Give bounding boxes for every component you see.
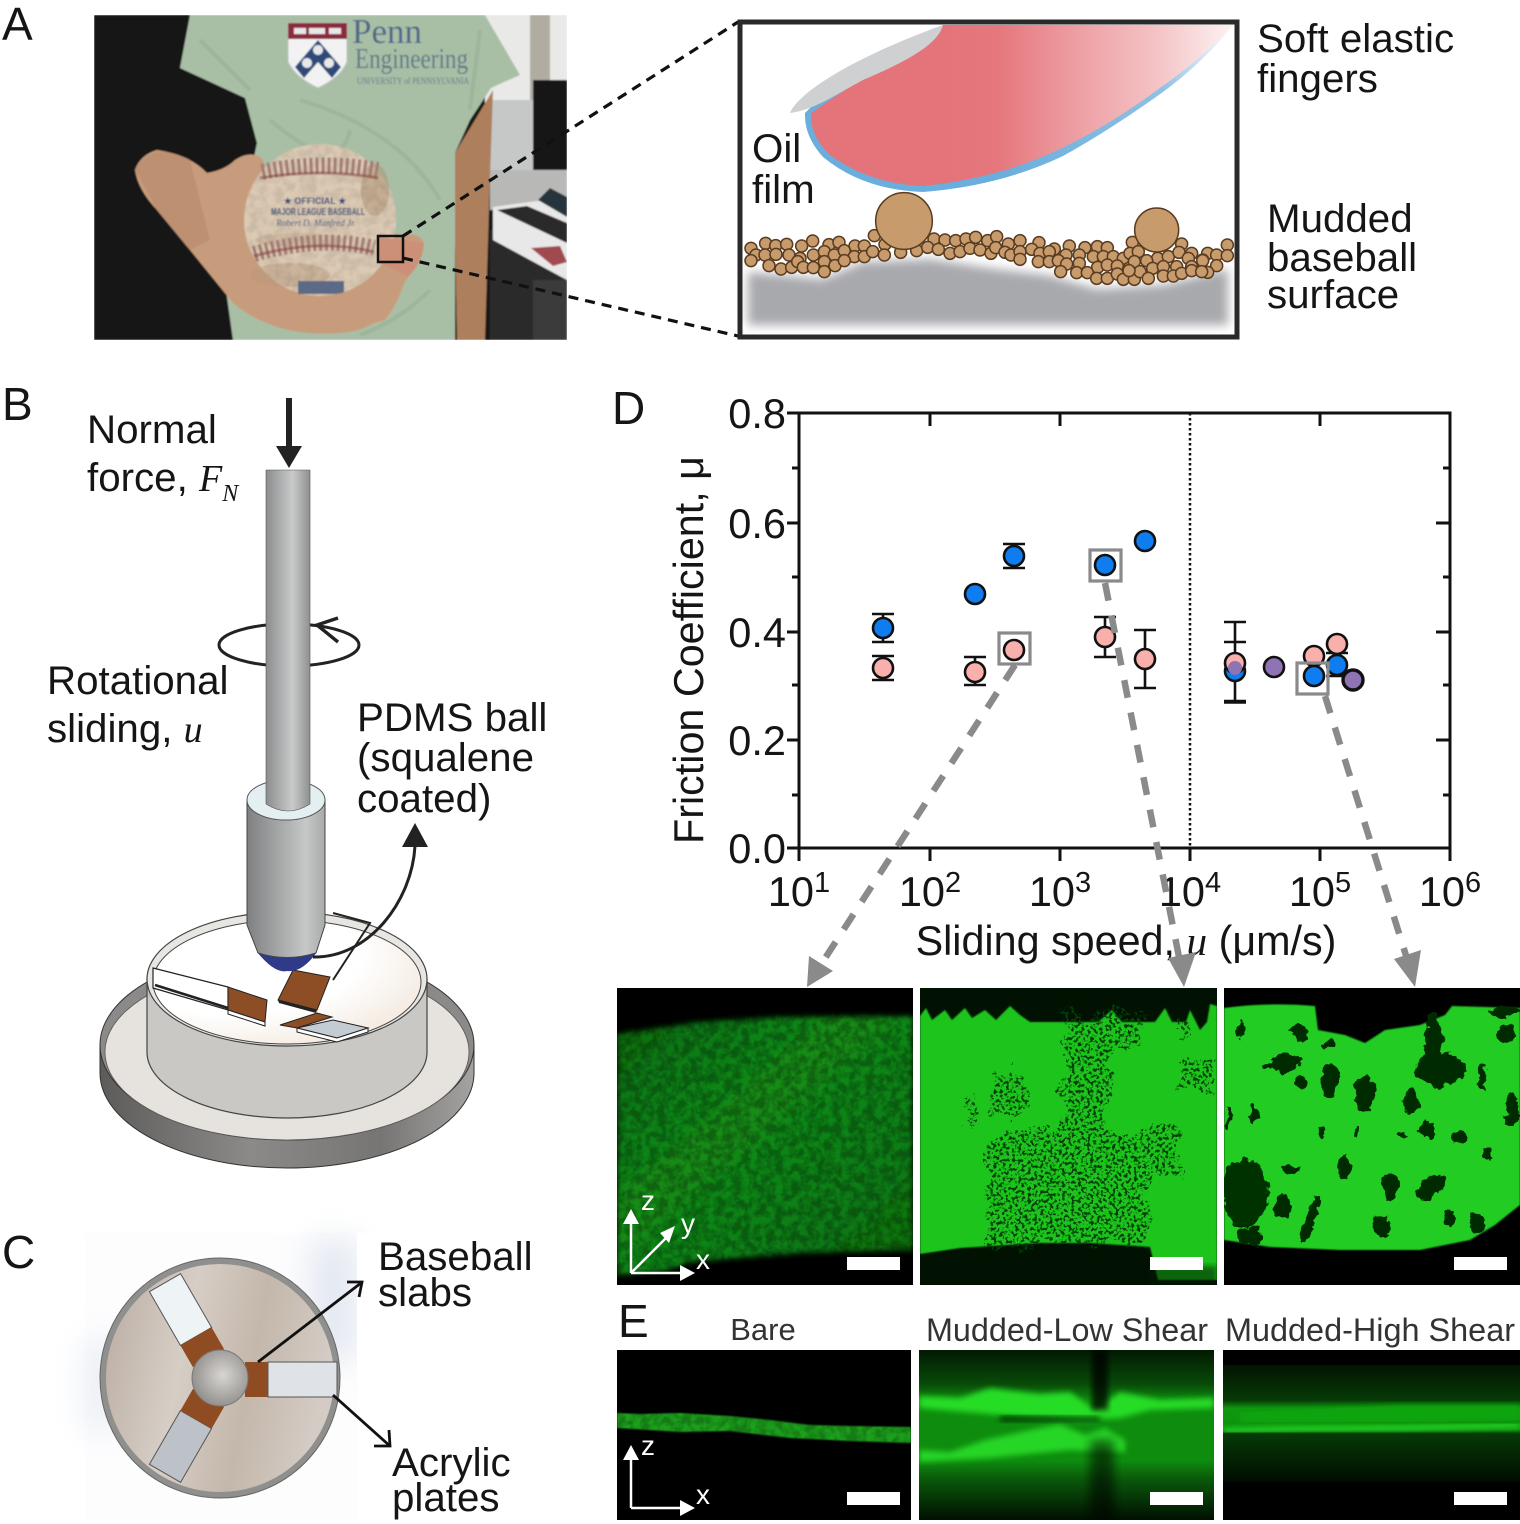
plate arm upper left	[149, 1274, 224, 1367]
tribometer apparatus	[100, 398, 474, 1168]
xz axes	[623, 1445, 695, 1516]
zoom dashed leader lines	[403, 22, 738, 336]
chart: friction coefficient vs sliding speed	[666, 390, 1481, 964]
label: normal force: force,	[87, 455, 199, 500]
shirt logo text	[352, 19, 469, 84]
baseball	[244, 144, 396, 296]
axis labels: y	[681, 1208, 695, 1239]
pink data: bare	[873, 627, 1347, 682]
axis labels: z	[641, 1430, 655, 1461]
label: rotational sliding: sliding,	[47, 706, 184, 751]
label: baseball slabs: Baseball	[378, 1234, 533, 1279]
label: PDMS ball: coated)	[357, 776, 491, 821]
label: normal force: Normal	[87, 407, 217, 452]
mudded baseball substrate	[748, 259, 1228, 325]
label: acrylic plates: Acrylic	[392, 1440, 511, 1485]
shirt logo shield	[288, 23, 347, 88]
label: PDMS ball: (squalene	[357, 735, 534, 780]
baseball: ★ OFFICIAL ★	[284, 196, 347, 206]
fingers covering ball bottom	[326, 285, 404, 326]
y tick labels: 0.4	[728, 609, 786, 656]
x axis title: Sliding speed, u (μm/s)	[916, 918, 1336, 964]
normal force arrow	[276, 398, 302, 468]
hand and forearm	[135, 150, 424, 334]
x tick labels: 10	[1029, 868, 1075, 915]
scale bar	[1150, 1492, 1203, 1505]
error bars	[872, 544, 1348, 702]
axis labels: z	[641, 1185, 655, 1216]
fluorescence image: mudded low shear	[920, 988, 1217, 1286]
cross-section: bare	[617, 1350, 911, 1520]
x tick labels: 10	[899, 868, 945, 915]
axis labels	[642, 1440, 710, 1504]
t-shirt	[180, 15, 520, 340]
y tick labels: 0.6	[728, 500, 786, 547]
x tick labels: 3	[1075, 867, 1091, 899]
x tick labels: 4	[1205, 867, 1221, 899]
right forearm	[455, 90, 493, 340]
scale bar	[1150, 1257, 1203, 1270]
baseball: MAJOR LEAGUE BASEBALL	[271, 207, 365, 218]
label: soft elastic fingers: fingers	[1257, 56, 1378, 101]
inset schematic: finger on mudded surface	[740, 22, 1237, 337]
dark patches	[1223, 1006, 1520, 1246]
label: oil film: Oil	[752, 126, 801, 171]
top view of holder	[80, 1233, 392, 1498]
y tick labels: 0.0	[728, 825, 786, 872]
cross-section: mudded low shear	[919, 1350, 1214, 1520]
arrow to acrylic plates	[333, 1395, 390, 1446]
x tick labels	[768, 867, 1481, 915]
label: mudded baseball surface: surface	[1267, 272, 1399, 317]
panel D label: D	[612, 382, 645, 434]
label: PDMS ball: PDMS ball	[357, 695, 547, 740]
panel E label: E	[618, 1295, 649, 1347]
label: normal force: F	[198, 458, 223, 500]
title: mudded high shear: Mudded-High Shear	[1225, 1312, 1515, 1348]
x tick labels: 10	[1159, 868, 1205, 915]
shirt logo text: Engineering	[355, 44, 468, 75]
title: bare: Bare	[730, 1312, 796, 1347]
dotted separator	[1189, 413, 1191, 848]
scale bar	[847, 1257, 900, 1270]
baseball slabs and acrylic plates	[153, 913, 370, 1042]
selected-point squares	[999, 550, 1328, 694]
axis labels: x	[696, 1479, 710, 1510]
y tick labels: 0.2	[728, 717, 786, 764]
curved callout arrow to PDMS ball	[313, 823, 428, 957]
collar and PDMS ball holder	[247, 780, 325, 971]
title: mudded low shear: Mudded-Low Shear	[926, 1312, 1208, 1348]
y axis title: Friction Coefficient, μ	[666, 456, 712, 844]
axis labels: x	[696, 1244, 710, 1275]
x tick labels: 5	[1335, 867, 1351, 899]
scale bar	[1454, 1492, 1507, 1505]
scale bar	[1454, 1257, 1507, 1270]
label: oil film: film	[752, 167, 815, 212]
x tick labels: 2	[945, 867, 961, 899]
label: mudded baseball surface: baseball	[1267, 235, 1417, 280]
fingernail	[790, 25, 943, 113]
dashed arrow to bare image	[807, 665, 1015, 987]
shirt logo text: UNIVERSITY of PENNSYLVANIA	[357, 76, 469, 86]
plot frame and ticks	[787, 413, 1450, 861]
label: rotational sliding: Rotational	[47, 658, 228, 703]
label: baseball slabs: slabs	[378, 1270, 472, 1315]
panel B label: B	[2, 378, 33, 430]
oil film	[805, 25, 1234, 192]
x tick labels: 10	[1289, 868, 1335, 915]
callout square on baseball	[378, 236, 403, 262]
xyz axes	[623, 1209, 695, 1281]
baseball: Robert D. Manfred Jr.	[275, 218, 356, 228]
overlapping and purple data	[1225, 653, 1363, 690]
blue data: mudded	[873, 531, 1347, 686]
plate arm right	[245, 1362, 337, 1397]
arrow to baseball slabs	[258, 1282, 362, 1362]
central ball	[192, 1350, 248, 1406]
y tick labels	[728, 390, 786, 872]
fluorescence image: mudded high shear	[1223, 988, 1520, 1285]
plate arm lower left	[149, 1389, 224, 1482]
y tick labels: 0.8	[728, 390, 786, 437]
label: acrylic plates: plates	[392, 1475, 500, 1520]
label: rotational sliding: u	[184, 709, 203, 751]
dashed arrow to low shear image	[1105, 583, 1196, 987]
shirt logo text: Penn	[352, 12, 422, 51]
lower dish	[100, 950, 474, 1168]
cross-section: mudded high shear	[1223, 1350, 1520, 1520]
bottom corner fade	[1154, 1262, 1217, 1281]
axis labels	[642, 1196, 710, 1269]
x tick labels: 10	[768, 868, 814, 915]
label: mudded baseball surface: Mudded	[1267, 196, 1413, 241]
inset frame	[740, 22, 1237, 337]
damaged mesh region	[985, 1013, 1147, 1246]
transparent holder wall	[147, 912, 427, 1118]
x tick labels: 1	[814, 867, 830, 899]
photo: hand holding baseball	[94, 12, 567, 340]
shaft	[266, 470, 310, 811]
soft finger	[811, 25, 1234, 186]
soil particles	[745, 193, 1233, 285]
x tick labels: 10	[1419, 868, 1465, 915]
label: soft elastic fingers: Soft elastic	[1257, 16, 1454, 61]
label: normal force: N	[221, 481, 240, 507]
fluorescence image: bare	[617, 988, 913, 1285]
dashed arrow to high shear image	[1325, 696, 1421, 987]
small mesh patches	[964, 1017, 1214, 1177]
x tick labels: 6	[1465, 867, 1481, 899]
rotation arrow	[219, 618, 359, 666]
panel C label: C	[2, 1226, 35, 1278]
scale bar	[847, 1492, 900, 1505]
